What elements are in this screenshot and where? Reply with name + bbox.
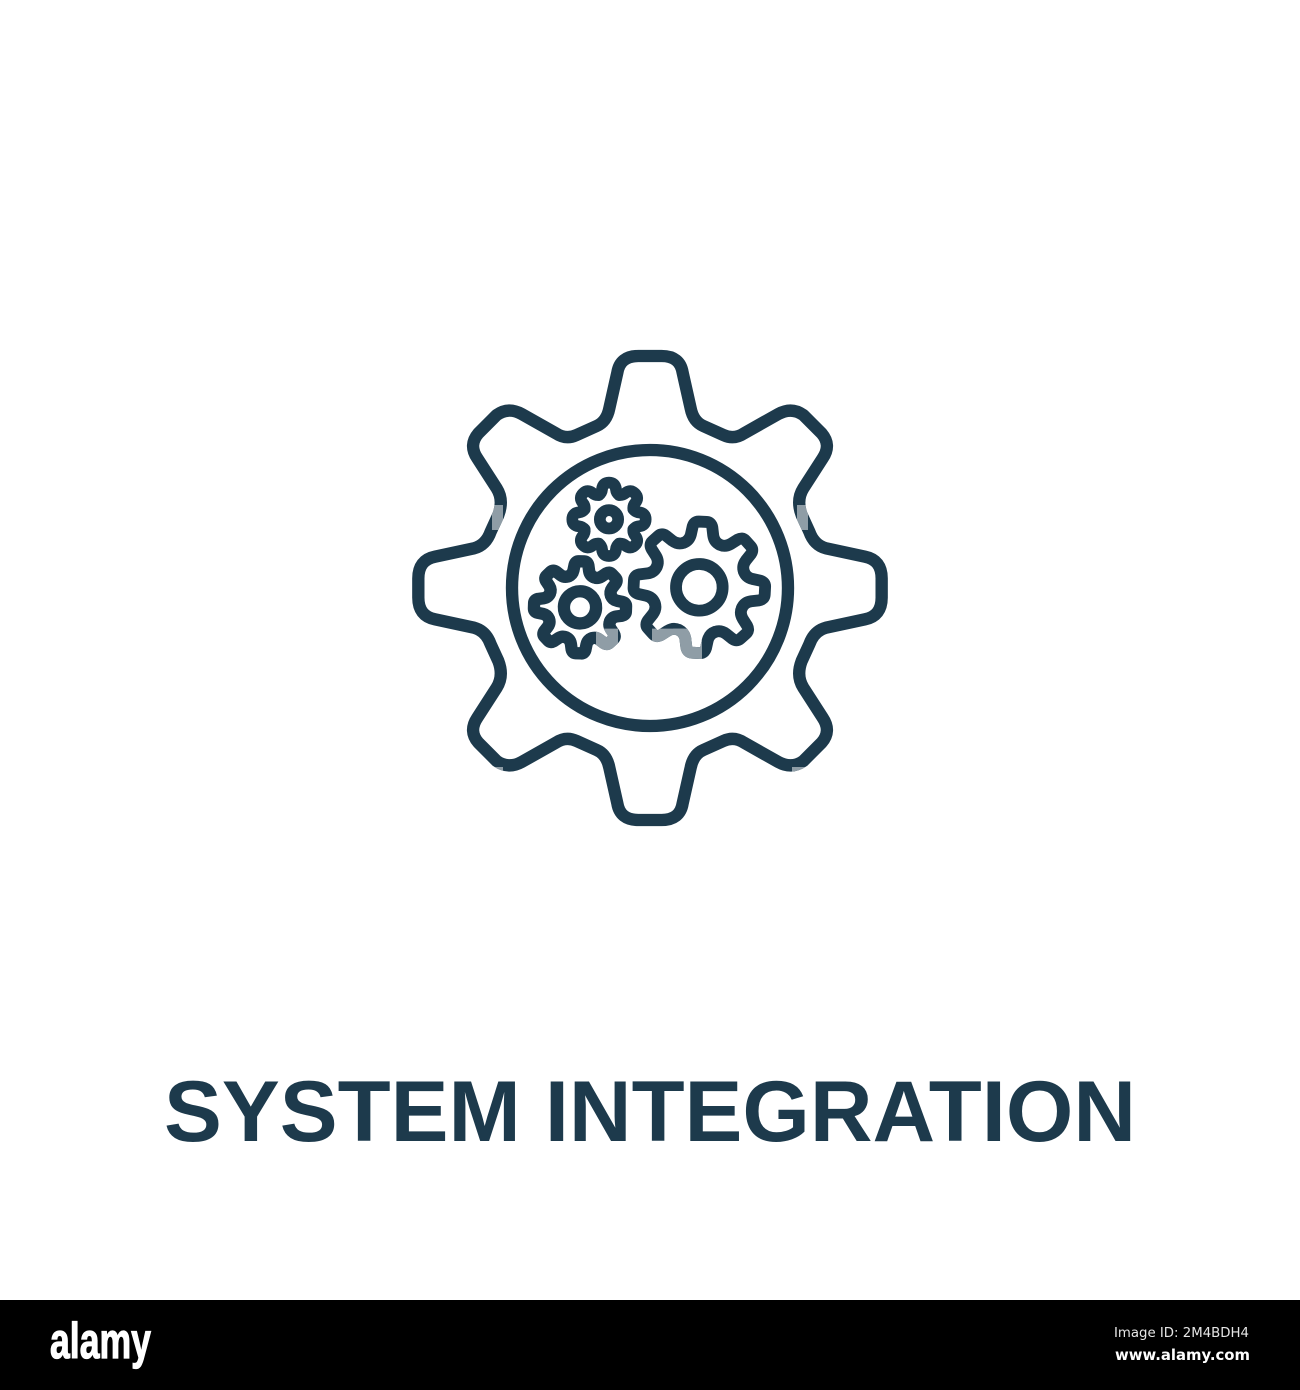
icon: inner circle — [512, 450, 788, 726]
icon: outer gear outline — [418, 356, 882, 820]
footer image id: Image ID: 2M4BDH4 — [1114, 1326, 1249, 1341]
icon: small cog — [572, 483, 646, 556]
icon: large cog — [630, 518, 768, 656]
title: SYSTEM INTEGRATION — [164, 1064, 1136, 1160]
footer logo: alamy — [50, 1313, 151, 1369]
footer bar — [0, 1300, 1300, 1390]
icon: medium cog — [532, 560, 628, 655]
watermark traces on the icon strokes — [492, 505, 808, 772]
footer website: www.alamy.com — [1115, 1346, 1250, 1364]
icon: system integration gear — [418, 356, 882, 820]
infographic canvas — [0, 350, 1300, 1390]
